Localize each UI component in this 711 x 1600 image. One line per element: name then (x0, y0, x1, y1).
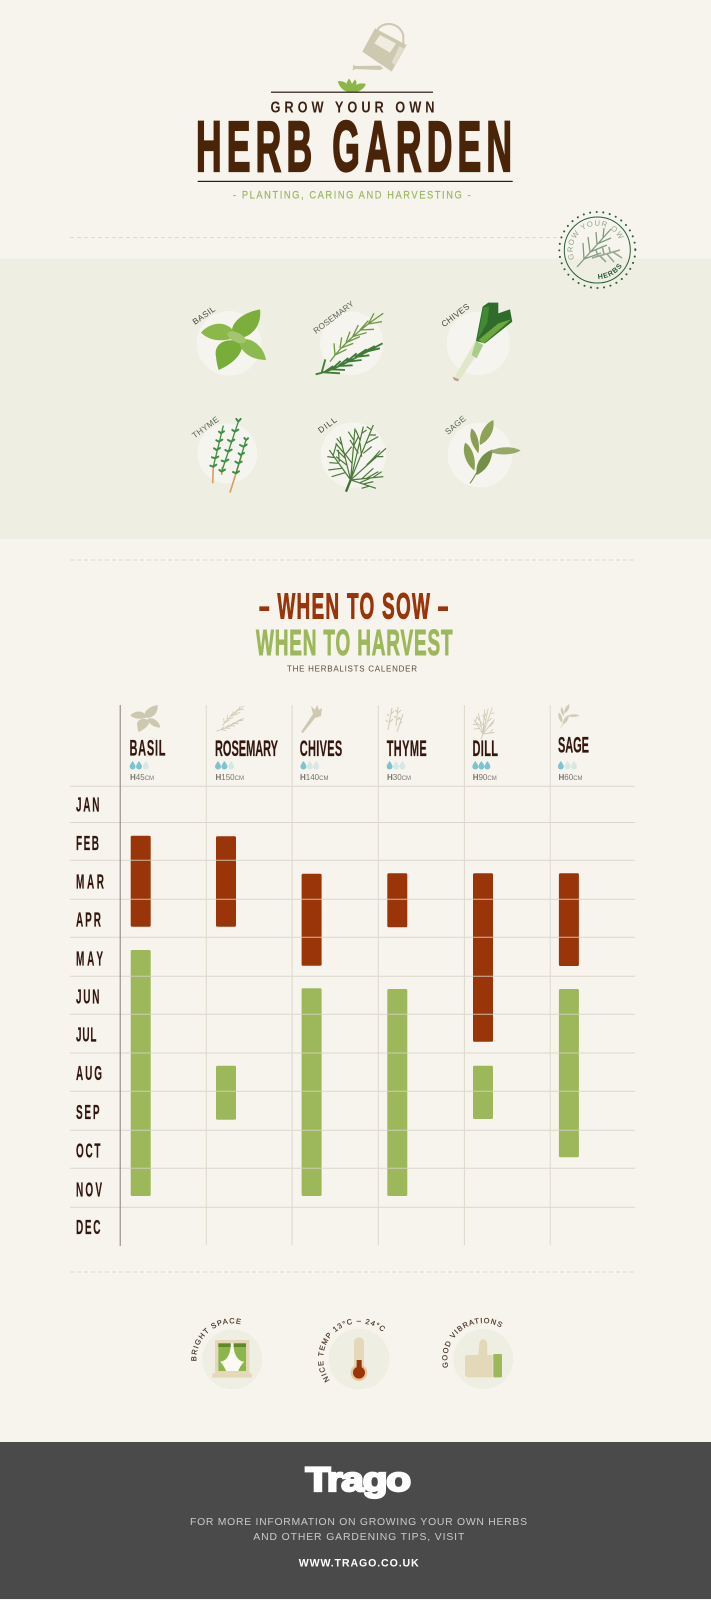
month labels: AUG (76, 1064, 102, 1085)
tip: bright space: BRIGHT SPACE (191, 1318, 241, 1361)
footer text: FOR MORE INFORMATION ON GROWING YOUR OWN HERBS (190, 1517, 527, 1528)
month labels: JUL (76, 1025, 97, 1047)
panel: herb illustrations band (0, 258, 711, 539)
herb: basil: BASIL (190, 304, 217, 327)
column: chives header: H140CM (300, 773, 328, 782)
column: sage header (558, 704, 589, 782)
tip: good vibrations (442, 1318, 513, 1389)
calendar heading (256, 587, 453, 673)
month labels: FEB (76, 834, 99, 855)
herb: rosemary (311, 298, 383, 375)
badge: grow your own herbs (558, 211, 636, 289)
column: basil header (130, 705, 166, 782)
month labels: DEC (76, 1218, 100, 1239)
herb: thyme (190, 414, 257, 493)
calendar heading: THE HERBALISTS CALENDER (287, 664, 417, 673)
calendar heading: WHEN TO HARVEST (256, 624, 453, 664)
plant sprout icon (338, 79, 366, 92)
month labels: NOV (76, 1180, 102, 1202)
herb: chives (439, 301, 512, 381)
column: rosemary header: ROSEMARY (215, 736, 278, 761)
month labels: APR (76, 910, 101, 932)
month labels (76, 795, 104, 1239)
month labels: OCT (76, 1141, 101, 1162)
herb: chives: CHIVES (439, 301, 472, 329)
logo: Trago: Trago (306, 1460, 411, 1498)
herb: dill (316, 414, 386, 492)
column: thyme header: THYME (387, 736, 427, 761)
month labels: MAY (76, 949, 103, 971)
tip: good vibrations: GOOD VIBRATIONS (442, 1318, 502, 1368)
herb: basil (190, 304, 266, 376)
column: dill header: H90CM (473, 773, 497, 782)
herb: sage: SAGE (443, 413, 468, 437)
herb: sage (443, 413, 521, 487)
column: chives header (300, 705, 342, 782)
column: chives header: CHIVES (300, 736, 342, 761)
title: - PLANTING, CARING AND HARVESTING - (233, 190, 471, 202)
month labels: MAR (76, 872, 104, 893)
watering can icon (353, 24, 407, 72)
column: thyme header: H30CM (387, 773, 411, 782)
footer text (190, 1517, 527, 1570)
footer panel (0, 1442, 711, 1599)
month labels: JUN (76, 987, 99, 1008)
sow and harvest bar chart (70, 705, 635, 1246)
footer text: WWW.TRAGO.CO.UK (299, 1558, 419, 1570)
herb: thyme: THYME (190, 414, 221, 440)
column: basil header: H45CM (130, 773, 154, 782)
herb: dill: DILL (316, 414, 339, 435)
footer text: AND OTHER GARDENING TIPS, VISIT (253, 1532, 465, 1543)
column: thyme header (386, 707, 427, 782)
month labels: JAN (76, 795, 99, 817)
title: HERB GARDEN (196, 106, 512, 186)
column: rosemary header (215, 706, 278, 782)
column: basil header: BASIL (130, 735, 166, 761)
herb: rosemary: ROSEMARY (311, 298, 356, 336)
tip: bright space (191, 1318, 262, 1389)
column: rosemary header: H150CM (216, 773, 244, 782)
tip: nice temp: NICE TEMP 13°C – 24°C (318, 1318, 385, 1383)
calendar heading: – WHEN TO SOW – (259, 587, 448, 627)
column: sage header: SAGE (558, 732, 589, 757)
column: dill header (472, 708, 498, 782)
column: sage header: H60CM (558, 773, 583, 782)
column: dill header: DILL (472, 736, 498, 761)
title: GROW YOUR OWN (270, 100, 435, 117)
badge: grow your own herbs: HERBS (598, 264, 622, 280)
month labels: SEP (76, 1103, 99, 1124)
